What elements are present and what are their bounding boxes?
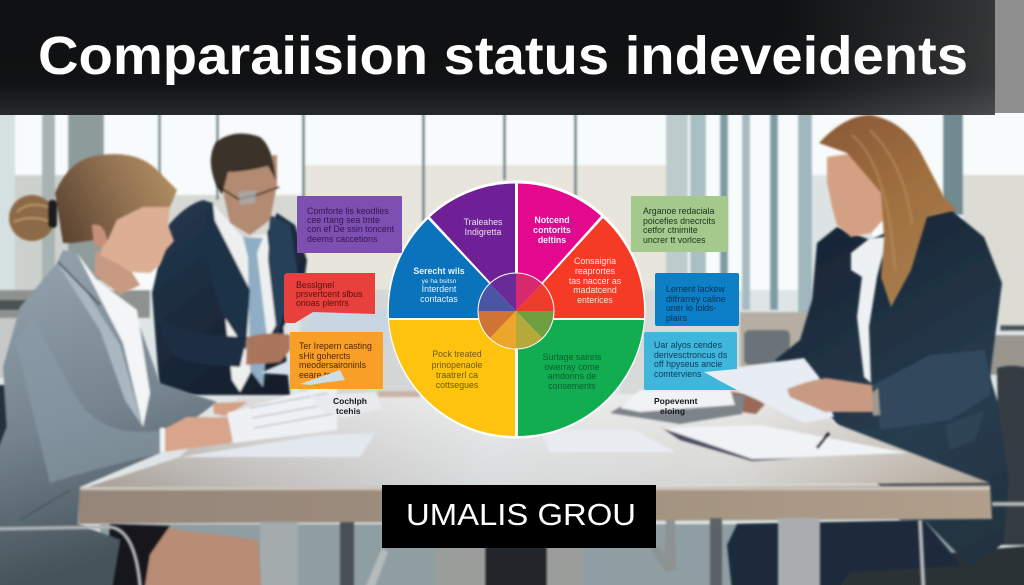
callout: blue — [655, 273, 739, 326]
callout: blue: Lement lackew — [666, 284, 725, 294]
centre hub — [478, 272, 554, 350]
callout: blue: dilfrarrey caline — [666, 294, 726, 304]
callout: green: poicefies dnecrcits — [643, 216, 716, 226]
callout: orange: eeare tsnd — [299, 370, 341, 380]
label: Popevennt eloing: eloing — [660, 406, 685, 416]
segment labels: deltins — [538, 235, 566, 245]
segment: red — [518, 218, 644, 318]
label: Popevennt eloing — [654, 396, 698, 416]
segment labels: contactas — [420, 294, 458, 304]
callout: orange: sHit gohercts — [299, 351, 351, 361]
papers and notebooks on the table — [180, 310, 908, 461]
segment labels: reaprortes — [575, 266, 616, 276]
callout: red — [284, 273, 375, 323]
woman on the left in grey blazer — [0, 154, 262, 585]
top title band — [0, 0, 1024, 115]
callout: cyan: off hpyseus ancie — [654, 359, 722, 369]
man in navy suit with glasses — [152, 133, 307, 395]
segment labels: owerray come — [544, 362, 600, 372]
segment labels: Pock treated — [432, 349, 482, 359]
callout: red: Besslgnel — [296, 280, 334, 290]
bottom brand label: UMALIS GROU — [406, 497, 636, 532]
callout: blue: plairs — [666, 313, 688, 323]
callout: red: prsvertcent slbus — [296, 289, 363, 299]
label: Cochlph tcehis: Cochlph — [333, 396, 367, 406]
segment labels: cottsegues — [436, 380, 479, 390]
segment labels: Notcend — [534, 215, 570, 225]
segment labels: prinopenaole — [432, 360, 483, 370]
callout: cyan — [644, 332, 737, 390]
callout: orange: Ter Irepern casting — [299, 341, 372, 351]
callout: purple: con ef De ssin toncent — [307, 224, 395, 234]
callout: cyan: Uar alyos cendes — [654, 340, 723, 350]
segment labels: Traleahes — [464, 217, 503, 227]
callout: green: cetfor ctnimite — [643, 225, 698, 235]
callout: purple — [297, 196, 402, 253]
segment: yellow — [389, 320, 515, 436]
callout: cyan: comterviens — [654, 369, 702, 379]
segment: magenta — [518, 184, 601, 309]
segment labels: tas naccer as — [569, 276, 622, 286]
callout: purple: cee rtang sea tmte — [307, 215, 380, 225]
callout: orange: meodersaironinls — [299, 360, 367, 370]
callout: purple: deems caccetions — [307, 234, 378, 244]
callout: orange — [290, 332, 383, 389]
segment labels: enterices — [577, 295, 613, 305]
segment labels: consements — [548, 381, 596, 391]
segment labels: madatcend — [573, 285, 617, 295]
callout: green: uncrer tt vorlces — [643, 235, 706, 245]
segment labels: amdonns de — [548, 371, 596, 381]
segment: purple — [430, 184, 515, 309]
chair arm rests — [0, 504, 1024, 585]
callout: green — [631, 196, 728, 252]
segment: green — [518, 320, 644, 436]
segment labels: Indigretta — [465, 227, 501, 237]
label: Cochlph tcehis — [333, 396, 367, 416]
segment labels: Surtage sainris — [543, 352, 602, 362]
callout: purple: Comforte lis keodlies — [307, 206, 389, 216]
bottom brand label — [382, 485, 656, 548]
table — [78, 393, 992, 585]
label: Popevennt eloing: Popevennt — [654, 396, 698, 406]
segment labels: traatrerl ca — [436, 370, 478, 380]
callout: red: orioas plentrs — [296, 298, 349, 308]
segment labels — [413, 215, 622, 391]
label: Cochlph tcehis: tcehis — [336, 406, 361, 416]
title text: Comparaiision status indeveidents — [38, 26, 968, 86]
callout: cyan: derivesctroncus ds — [654, 350, 728, 360]
segment labels: ye ha bsitsn — [422, 278, 457, 285]
callout: blue: uner lo lolds- — [666, 303, 716, 313]
callout: green: Arganoe redaciala — [643, 206, 715, 216]
segment labels: contorits — [533, 225, 571, 235]
panel: circular pie chart — [388, 180, 646, 438]
segment: blue — [389, 219, 515, 318]
segment labels: Serecht wils — [413, 266, 465, 276]
segment labels: Consaigria — [574, 256, 616, 266]
segment labels: Interdent — [422, 284, 457, 294]
right woman's head, hair, shirt and arms — [704, 115, 990, 450]
right woman's body and trousers behind the table — [727, 210, 1024, 585]
